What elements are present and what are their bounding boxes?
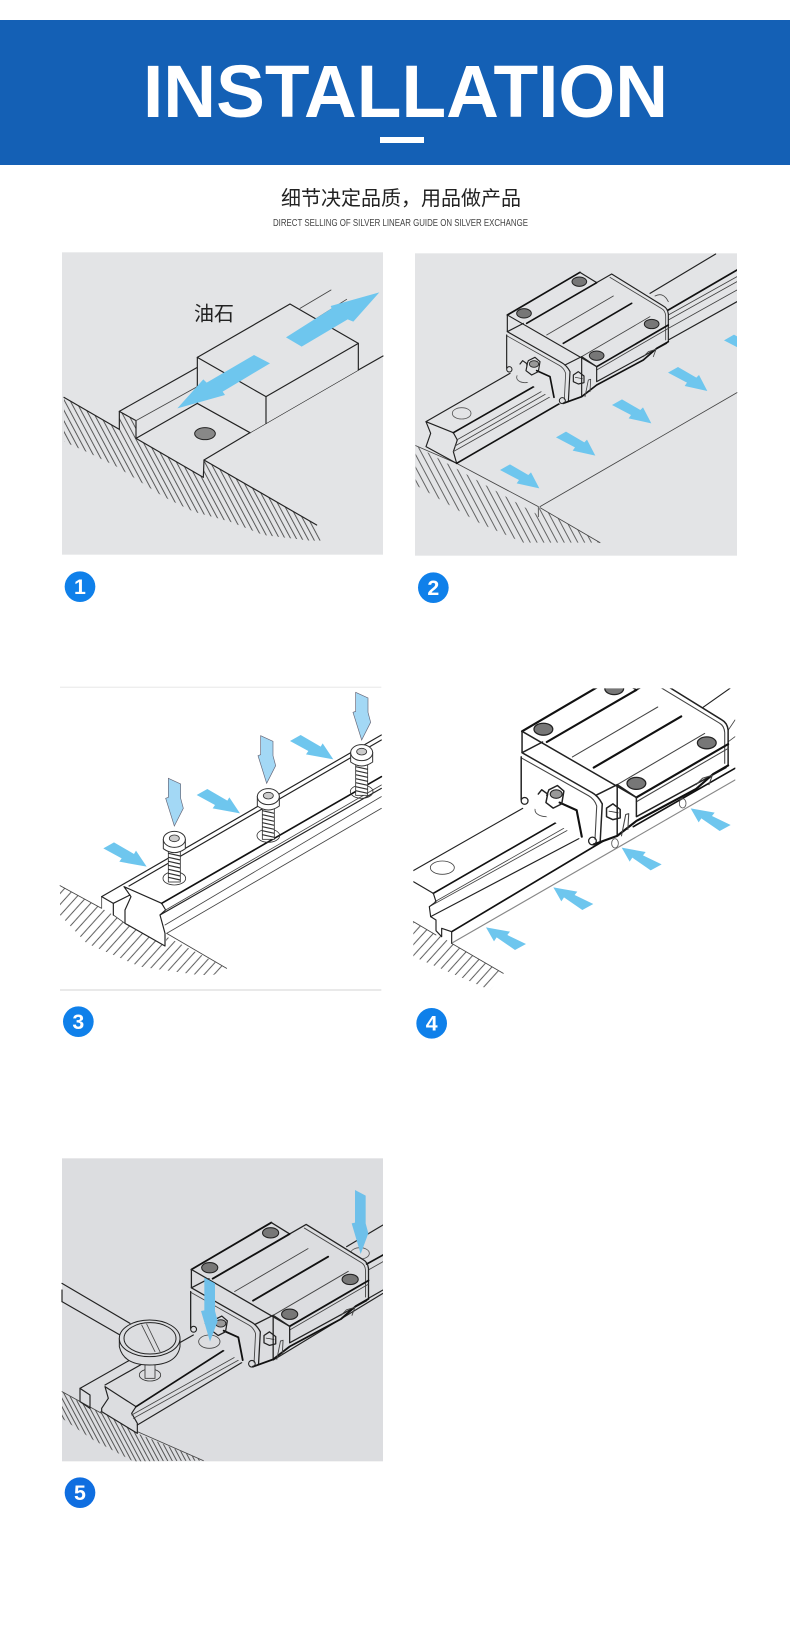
panel: step 4 side pressure	[413, 677, 735, 1039]
step badge 2	[418, 572, 449, 603]
step badge 3	[63, 1006, 94, 1037]
bolt hole	[199, 1335, 220, 1348]
carriage block	[191, 1223, 368, 1367]
panel: step 3 tighten screws	[60, 687, 381, 1037]
step badge 5: 5	[74, 1481, 86, 1505]
panel: step 5 dial gauge check	[62, 1158, 383, 1508]
dial gauge	[62, 1283, 180, 1381]
hatched base section	[413, 922, 503, 990]
step badge 4: 4	[426, 1012, 438, 1036]
panel: step 2 place carriage and rail	[415, 253, 763, 603]
rail	[413, 688, 735, 943]
step badge 3: 3	[72, 1010, 84, 1034]
subtitle English: DIRECT SELLING OF SILVER LINEAR GUIDE ON SILVER EXCHANGE	[273, 218, 528, 229]
rail	[80, 1225, 383, 1433]
carriage block	[521, 677, 728, 845]
title underline bar	[380, 137, 424, 143]
step badge 5	[65, 1477, 95, 1508]
step badge 1	[65, 571, 95, 602]
hatched base section	[60, 886, 227, 975]
arrows: push toward datum	[500, 335, 763, 488]
arrows: push toward datum	[103, 735, 333, 867]
arrows: side pressure	[486, 808, 731, 950]
arrow: outward left	[177, 355, 270, 408]
arrows: press down	[201, 1190, 368, 1342]
label: oilstone: 油石	[194, 303, 234, 326]
carriage block	[507, 272, 668, 404]
title: INSTALLATION	[143, 50, 668, 133]
screws	[163, 745, 373, 885]
hatched base section	[416, 446, 600, 543]
arrows: screw down	[166, 692, 371, 826]
bolt hole	[195, 428, 215, 440]
panel: step 1 oilstone	[62, 252, 383, 602]
step badge 4	[416, 1008, 447, 1039]
hatched base section	[64, 397, 321, 541]
rail	[426, 254, 737, 463]
step badge 1: 1	[74, 575, 86, 599]
header banner	[0, 20, 790, 165]
rail	[102, 735, 381, 946]
oilstone block	[197, 304, 358, 433]
hatched base section	[62, 1392, 203, 1461]
subtitle Chinese: 细节决定品质，用品做产品	[281, 187, 521, 210]
step badge 2: 2	[427, 576, 439, 600]
arrow: outward right	[286, 292, 379, 347]
